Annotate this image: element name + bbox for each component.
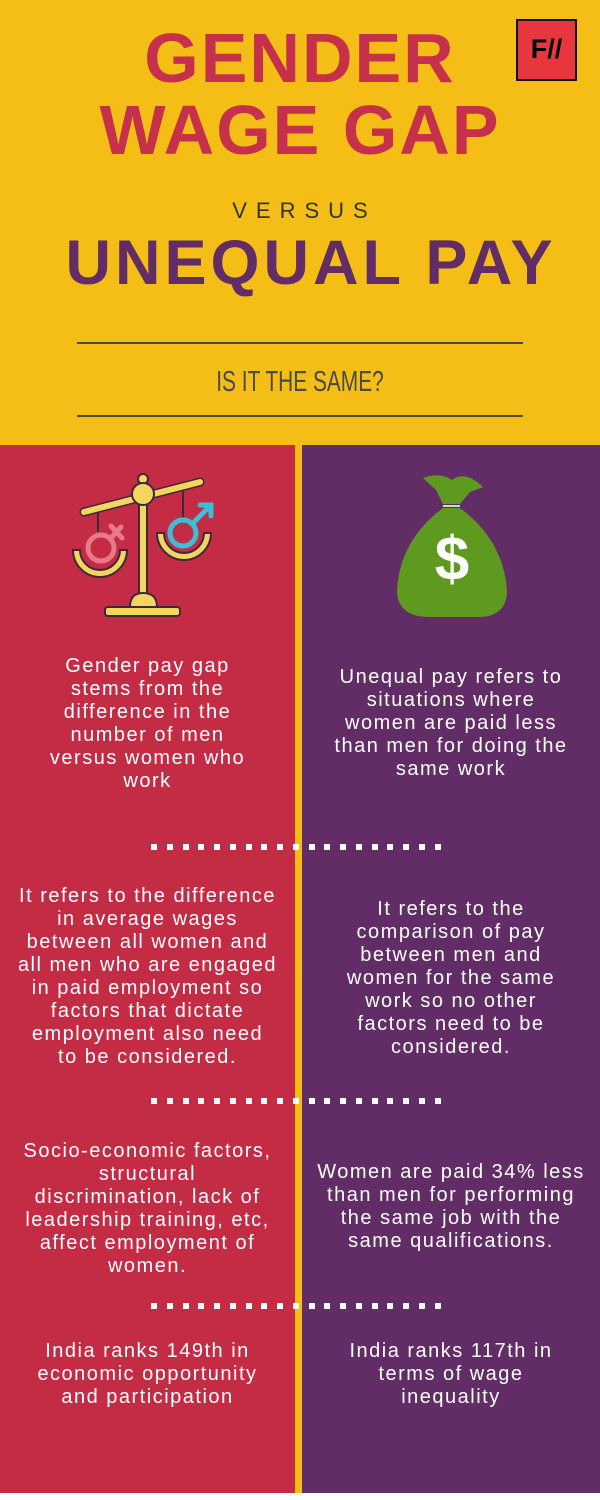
text: right block 1: than men for doing the (334, 735, 568, 757)
text: left block 2: in average wages (57, 908, 238, 930)
text: left block 1: versus women who (50, 747, 245, 769)
text: left block 3: Socio-economic factors, (24, 1140, 271, 1162)
subtitle question: IS IT THE SAME? (216, 366, 384, 398)
text: left block 2: It refers to the difference (19, 885, 276, 907)
text: left block 3: women. (108, 1255, 187, 1277)
text: left block 1: number of men (70, 724, 224, 746)
text: right block 1: situations where (367, 689, 535, 711)
text: right block 4 (349, 1340, 553, 1408)
title: unequal pay: UNEQUAL PAY (66, 228, 556, 298)
text: left block 2: to be considered. (58, 1046, 237, 1068)
text: left block 3: structural (99, 1163, 196, 1185)
text: right block 1: same work (396, 758, 506, 780)
text: left block 2 (18, 885, 277, 1068)
text: right block 2: factors need to be (357, 1013, 545, 1035)
text: left block 1: stems from the (71, 678, 224, 700)
text: right block 1: women are paid less (345, 712, 557, 734)
header panel (0, 0, 600, 445)
text: right block 4: India ranks 117th in (349, 1340, 553, 1362)
text: right block 4: inequality (401, 1386, 501, 1408)
logo (516, 19, 577, 81)
text: left block 3: discrimination, lack of (35, 1186, 260, 1208)
text: left block 3: leadership training, etc, (25, 1209, 270, 1231)
text: left block 3 (24, 1140, 271, 1277)
text: right block 2: work so no other (365, 990, 537, 1012)
panel: right unequal pay column (302, 445, 600, 1493)
text: right block 3: same qualifications. (348, 1230, 554, 1252)
text: right block 2 (346, 898, 555, 1058)
icon: money bag (397, 475, 507, 617)
text: right block 1 (334, 666, 568, 780)
text: right block 2: considered. (391, 1036, 511, 1058)
dollar sign: $ (435, 525, 469, 594)
text: left block 4: and participation (61, 1386, 234, 1408)
text: left block 2: in paid employment so (32, 977, 263, 999)
text: right block 2: comparison of pay (357, 921, 545, 943)
text: right block 4: terms of wage (378, 1363, 524, 1385)
text: left block 2: employment also need (32, 1023, 263, 1045)
text: left block 1: difference in the (64, 701, 231, 723)
text: right block 3: the same job with the (341, 1207, 561, 1229)
text: left block 2: factors that dictate (51, 1000, 244, 1022)
icon: balance scale (72, 473, 214, 617)
text: right block 1: Unequal pay refers to (340, 666, 562, 688)
text: right block 2: It refers to the (377, 898, 525, 920)
text: left block 2: all men who are engaged (18, 954, 277, 976)
text: left block 3: affect employment of (40, 1232, 255, 1254)
text: right block 2: between men and (360, 944, 542, 966)
text: left block 1 (50, 655, 245, 792)
text: right block 3: Women are paid 34% less (317, 1161, 585, 1183)
text: left block 4 (37, 1340, 258, 1408)
text: right block 3 (317, 1161, 585, 1252)
text: left block 4: India ranks 149th in (45, 1340, 250, 1362)
logo: F// (531, 34, 562, 64)
text: left block 1: Gender pay gap (65, 655, 230, 677)
title: gender wage gap (99, 19, 501, 169)
text: left block 1: work (123, 770, 172, 792)
text: right block 3: than men for performing (327, 1184, 575, 1206)
title: gender wage gap: WAGE GAP (99, 91, 501, 169)
text: right block 2: women for the same (347, 967, 555, 989)
text: left block 4: economic opportunity (37, 1363, 258, 1385)
versus label: VERSUS (232, 198, 377, 223)
text: left block 2: between all women and (27, 931, 268, 953)
panel: left gender wage gap column (0, 445, 295, 1493)
title: gender wage gap: GENDER (144, 19, 456, 97)
